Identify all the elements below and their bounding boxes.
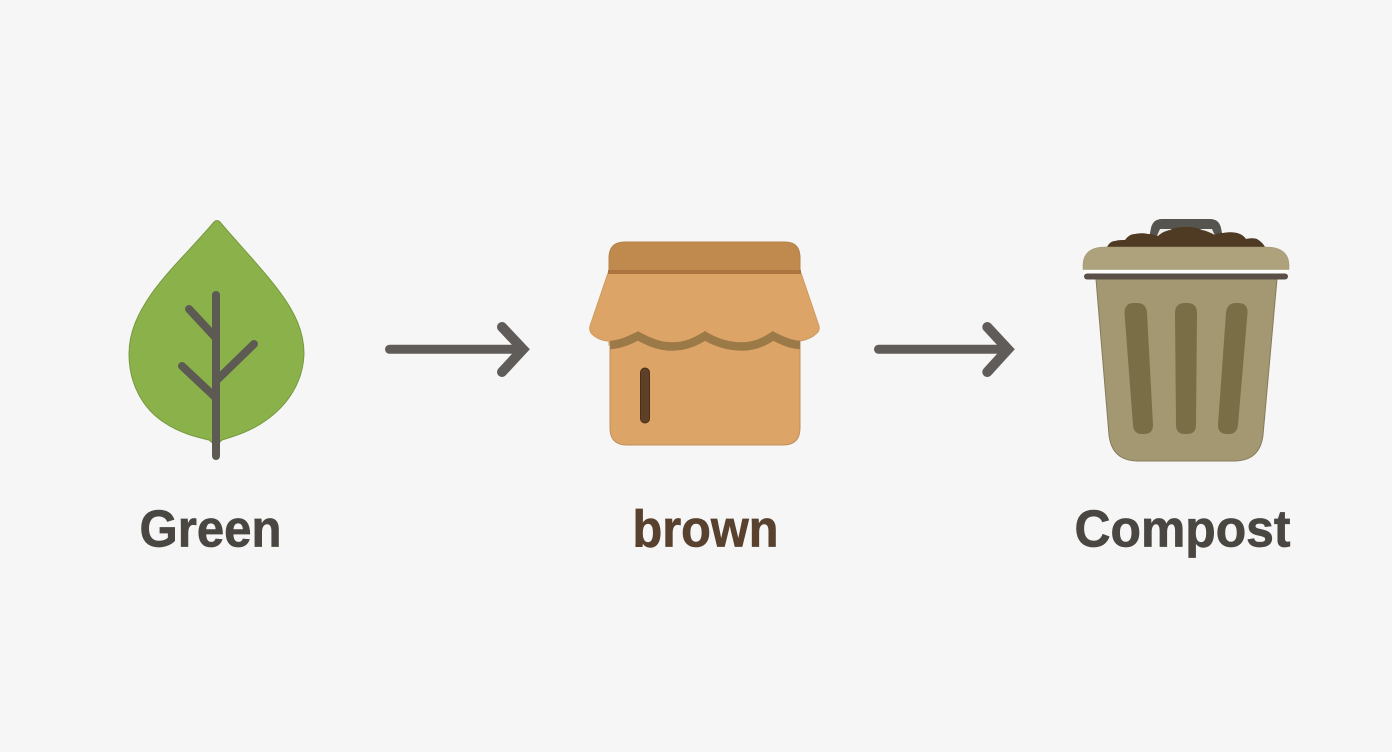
arrow: brown to compost: [878, 327, 1008, 372]
icon: compost bin: [1083, 219, 1289, 461]
bin handle: [1149, 219, 1223, 238]
icon: brown box with awning: [590, 242, 819, 445]
bin body: [1096, 279, 1277, 461]
compost pile: [1107, 227, 1265, 247]
right slot: [1218, 303, 1248, 434]
left slot: [1124, 303, 1153, 434]
handle slot: [640, 368, 650, 423]
middle slot: [1175, 303, 1197, 434]
lid rim: [1084, 274, 1288, 280]
awning: [590, 273, 819, 346]
box body: [610, 330, 800, 445]
lid gap: [1084, 269, 1288, 274]
lid seam: [608, 270, 801, 274]
icon: green leaf: [129, 220, 304, 456]
scalloped shadow: [610, 336, 800, 346]
label: Compost: Compost: [1074, 500, 1290, 558]
bin lid: [1083, 247, 1289, 270]
label: brown: brown: [632, 500, 778, 558]
box lid: [609, 242, 800, 275]
arrow: green to brown: [390, 327, 523, 372]
label: Green: Green: [140, 500, 282, 558]
